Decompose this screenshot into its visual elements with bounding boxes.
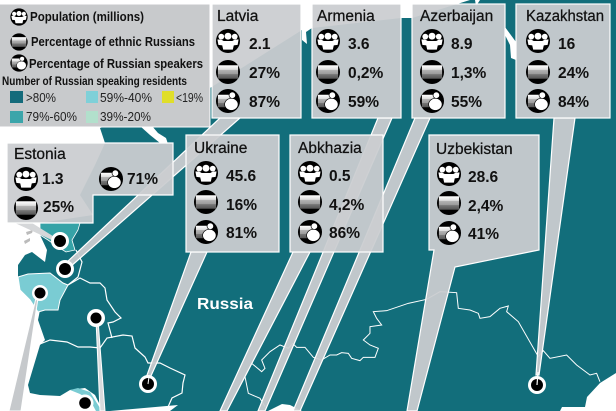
stats: 2.1 [249,36,271,53]
pointer: Estonia [15,223,56,241]
stats [420,29,487,113]
stats: 81% [226,225,257,242]
marker: Moldova [76,394,94,411]
panel: Armenia [312,4,401,118]
country name: Abkhazia [298,140,362,157]
colour key: 59%-40% [100,91,152,105]
pointer: Lithuania [9,298,38,411]
stats: 3.6 [348,36,370,53]
country name: Ukraine [194,140,247,157]
panel: legend [0,4,210,127]
legend item: population: Population (millions) [30,10,144,24]
legend heading: Number of Russian speaking residents [2,76,187,88]
stats: 87% [249,94,280,111]
stats [526,29,589,113]
Crimea region [70,388,104,411]
stats: 45.6 [226,168,257,185]
panel: Kazakhstan [516,4,610,118]
stats: 71% [127,171,158,188]
stats: 1.3 [42,171,64,188]
marker: Kazakhstan [528,372,546,394]
stats: 2,4% [468,198,504,215]
stats [437,162,504,245]
stats: 1,3% [451,65,487,82]
panel: Ukraine [186,135,279,252]
map label: Russia: Russia [197,296,253,313]
stats: 0.5 [329,168,351,185]
borders in the east [245,292,600,407]
stats: 86% [329,225,360,242]
pointer: Belarus [96,320,105,411]
marker: Latvia [56,260,74,278]
stats [216,29,280,113]
stats: 27% [249,65,280,82]
panel: Uzbekistan with pointer [407,135,539,411]
colour key: <19% [176,91,203,105]
borders in the west [40,250,185,407]
Estonia region [40,223,80,252]
stats: 55% [451,94,482,111]
legend item: ethnic Russians: Percentage of ethnic Russians [31,35,195,49]
panel: Latvia [212,4,301,118]
panel: Azerbaijan [412,4,505,118]
country name: Latvia [217,8,259,25]
stats [298,161,365,244]
stats: 16% [226,197,257,214]
country name: Armenia [317,8,375,25]
marker: Ukraine [139,375,157,393]
stats: 59% [348,94,379,111]
stats [194,161,257,244]
stats: 25% [43,199,74,216]
marker: Lithuania [32,285,48,301]
stats: 16 [558,36,576,53]
marker: Estonia [51,232,69,250]
pointer: Abkhazia [220,252,310,411]
colour key: 39%-20% [100,110,151,124]
stats: 0,2% [348,65,384,82]
stats [316,29,384,113]
country name: Kazakhstan [526,8,604,25]
stats [14,167,158,220]
legend item: Russian speakers [10,54,203,72]
pointer: Armenia [258,118,392,411]
panel: Abkhazia [290,135,383,252]
pointer: Azerbaijan [293,118,430,411]
pointer: Latvia [66,118,240,267]
country name: Azerbaijan [420,8,493,25]
colour key [10,91,203,124]
panel: Estonia [7,143,173,223]
country name: Uzbekistan [436,141,513,158]
pointer: Ukraine [146,252,207,378]
stats: 8.9 [451,36,473,53]
stats: 84% [558,94,589,111]
stats: 4,2% [329,197,365,214]
stats: 28.6 [468,169,499,186]
legend item: Russian speakers: Percentage of Russian speakers [29,57,203,71]
country name: Estonia [14,146,66,163]
pointer: Kazakhstan [536,118,575,375]
islands [24,230,33,244]
legend item: ethnic Russians [10,33,195,51]
colour key: 79%-60% [26,110,77,124]
legend item: population [10,8,144,26]
stats: 24% [558,65,589,82]
Lithuania region [18,273,68,312]
stats: 41% [468,226,499,243]
colour key: >80% [26,91,56,105]
marker: Belarus [87,309,105,327]
